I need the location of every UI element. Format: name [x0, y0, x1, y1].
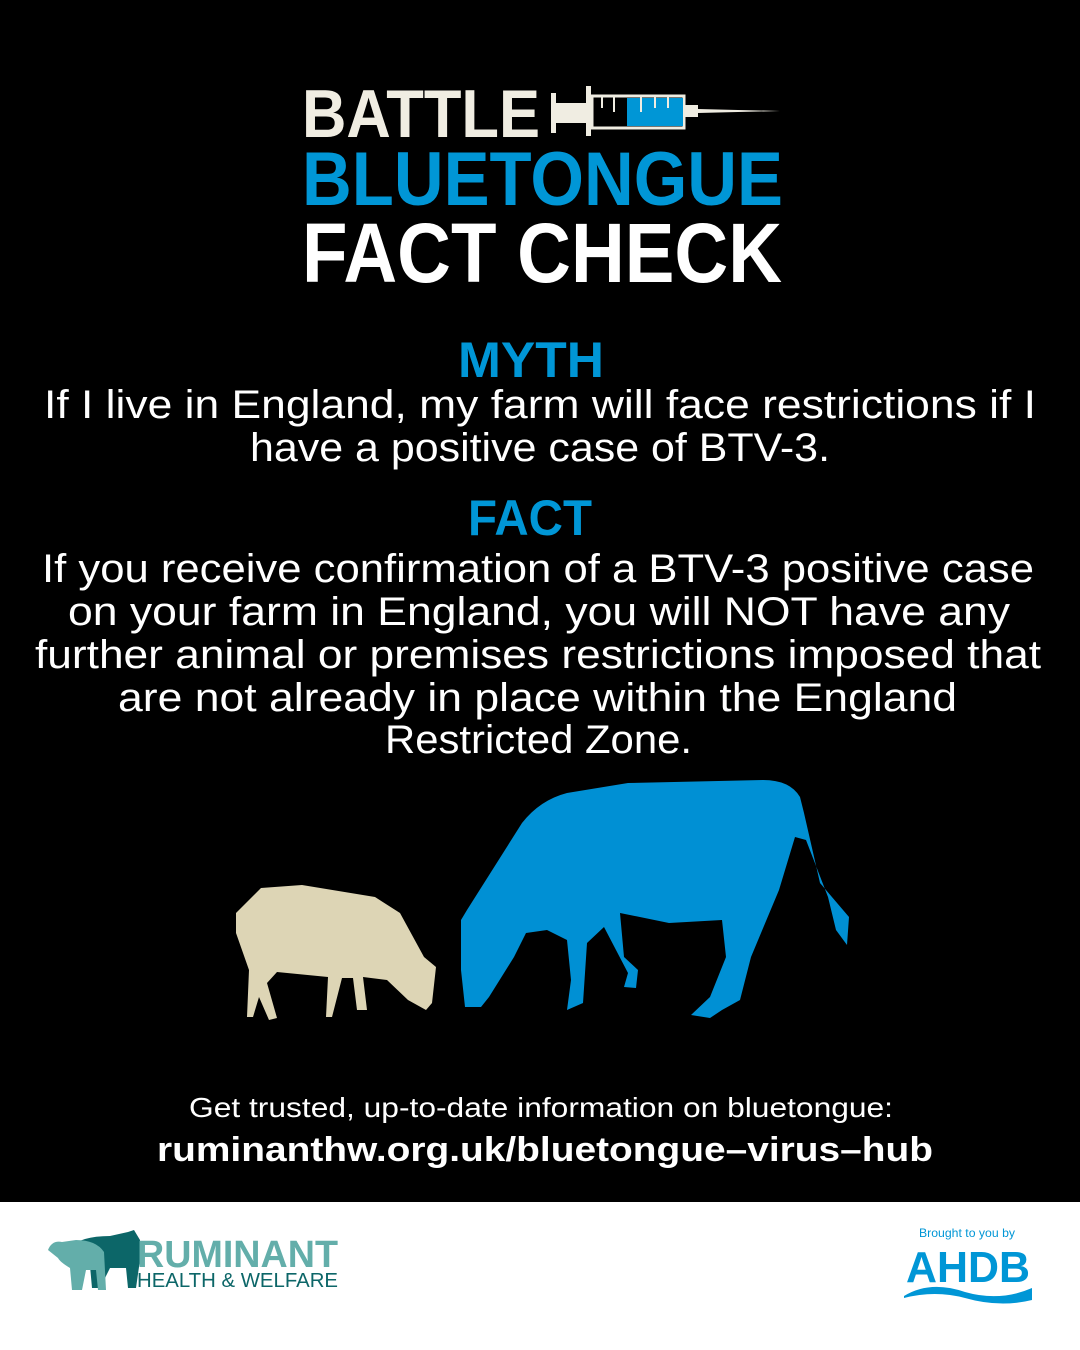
logo: ruminant health & welfare: HEALTH & WELFARE: [137, 1270, 338, 1292]
logo: AHDB: AHDB: [906, 1243, 1030, 1292]
fact text: If you receive confirmation of a BTV-3 positive case: [42, 547, 1034, 591]
icon: cow: [461, 780, 849, 1018]
myth text: If I live in England, my farm will face restrictions if I: [44, 383, 1036, 427]
icon: sheep: [236, 885, 436, 1020]
myth text: have a positive case of BTV-3.: [250, 426, 830, 470]
myth heading: MYTH: [458, 332, 604, 388]
footer panel: [0, 1202, 1080, 1350]
info text: Get trusted, up-to-date information on bluetongue:: [189, 1092, 893, 1123]
title: FACT CHECK: [302, 206, 782, 300]
fact heading: FACT: [468, 490, 592, 546]
title: BATTLE: [302, 76, 540, 152]
logo: ruminant health & welfare: [48, 1230, 338, 1292]
logo: ruminant health & welfare: RUMINANT: [137, 1234, 338, 1276]
fact text: Restricted Zone.: [385, 718, 692, 762]
fact text: on your farm in England, you will NOT have any: [68, 590, 1010, 634]
fact text: [35, 547, 1041, 762]
title: [302, 76, 783, 300]
url: ruminanthw.org.uk/bluetongue–virus–hub: [157, 1131, 933, 1169]
title: BLUETONGUE: [302, 137, 783, 222]
fact text: are not already in place within the England: [118, 676, 957, 720]
fact text: further animal or premises restrictions imposed that: [35, 633, 1041, 677]
myth text: [44, 383, 1036, 470]
icon: syringe: [551, 86, 780, 136]
logo: AHDB: Brought to you by: [919, 1226, 1015, 1240]
logo: AHDB: [904, 1226, 1032, 1304]
